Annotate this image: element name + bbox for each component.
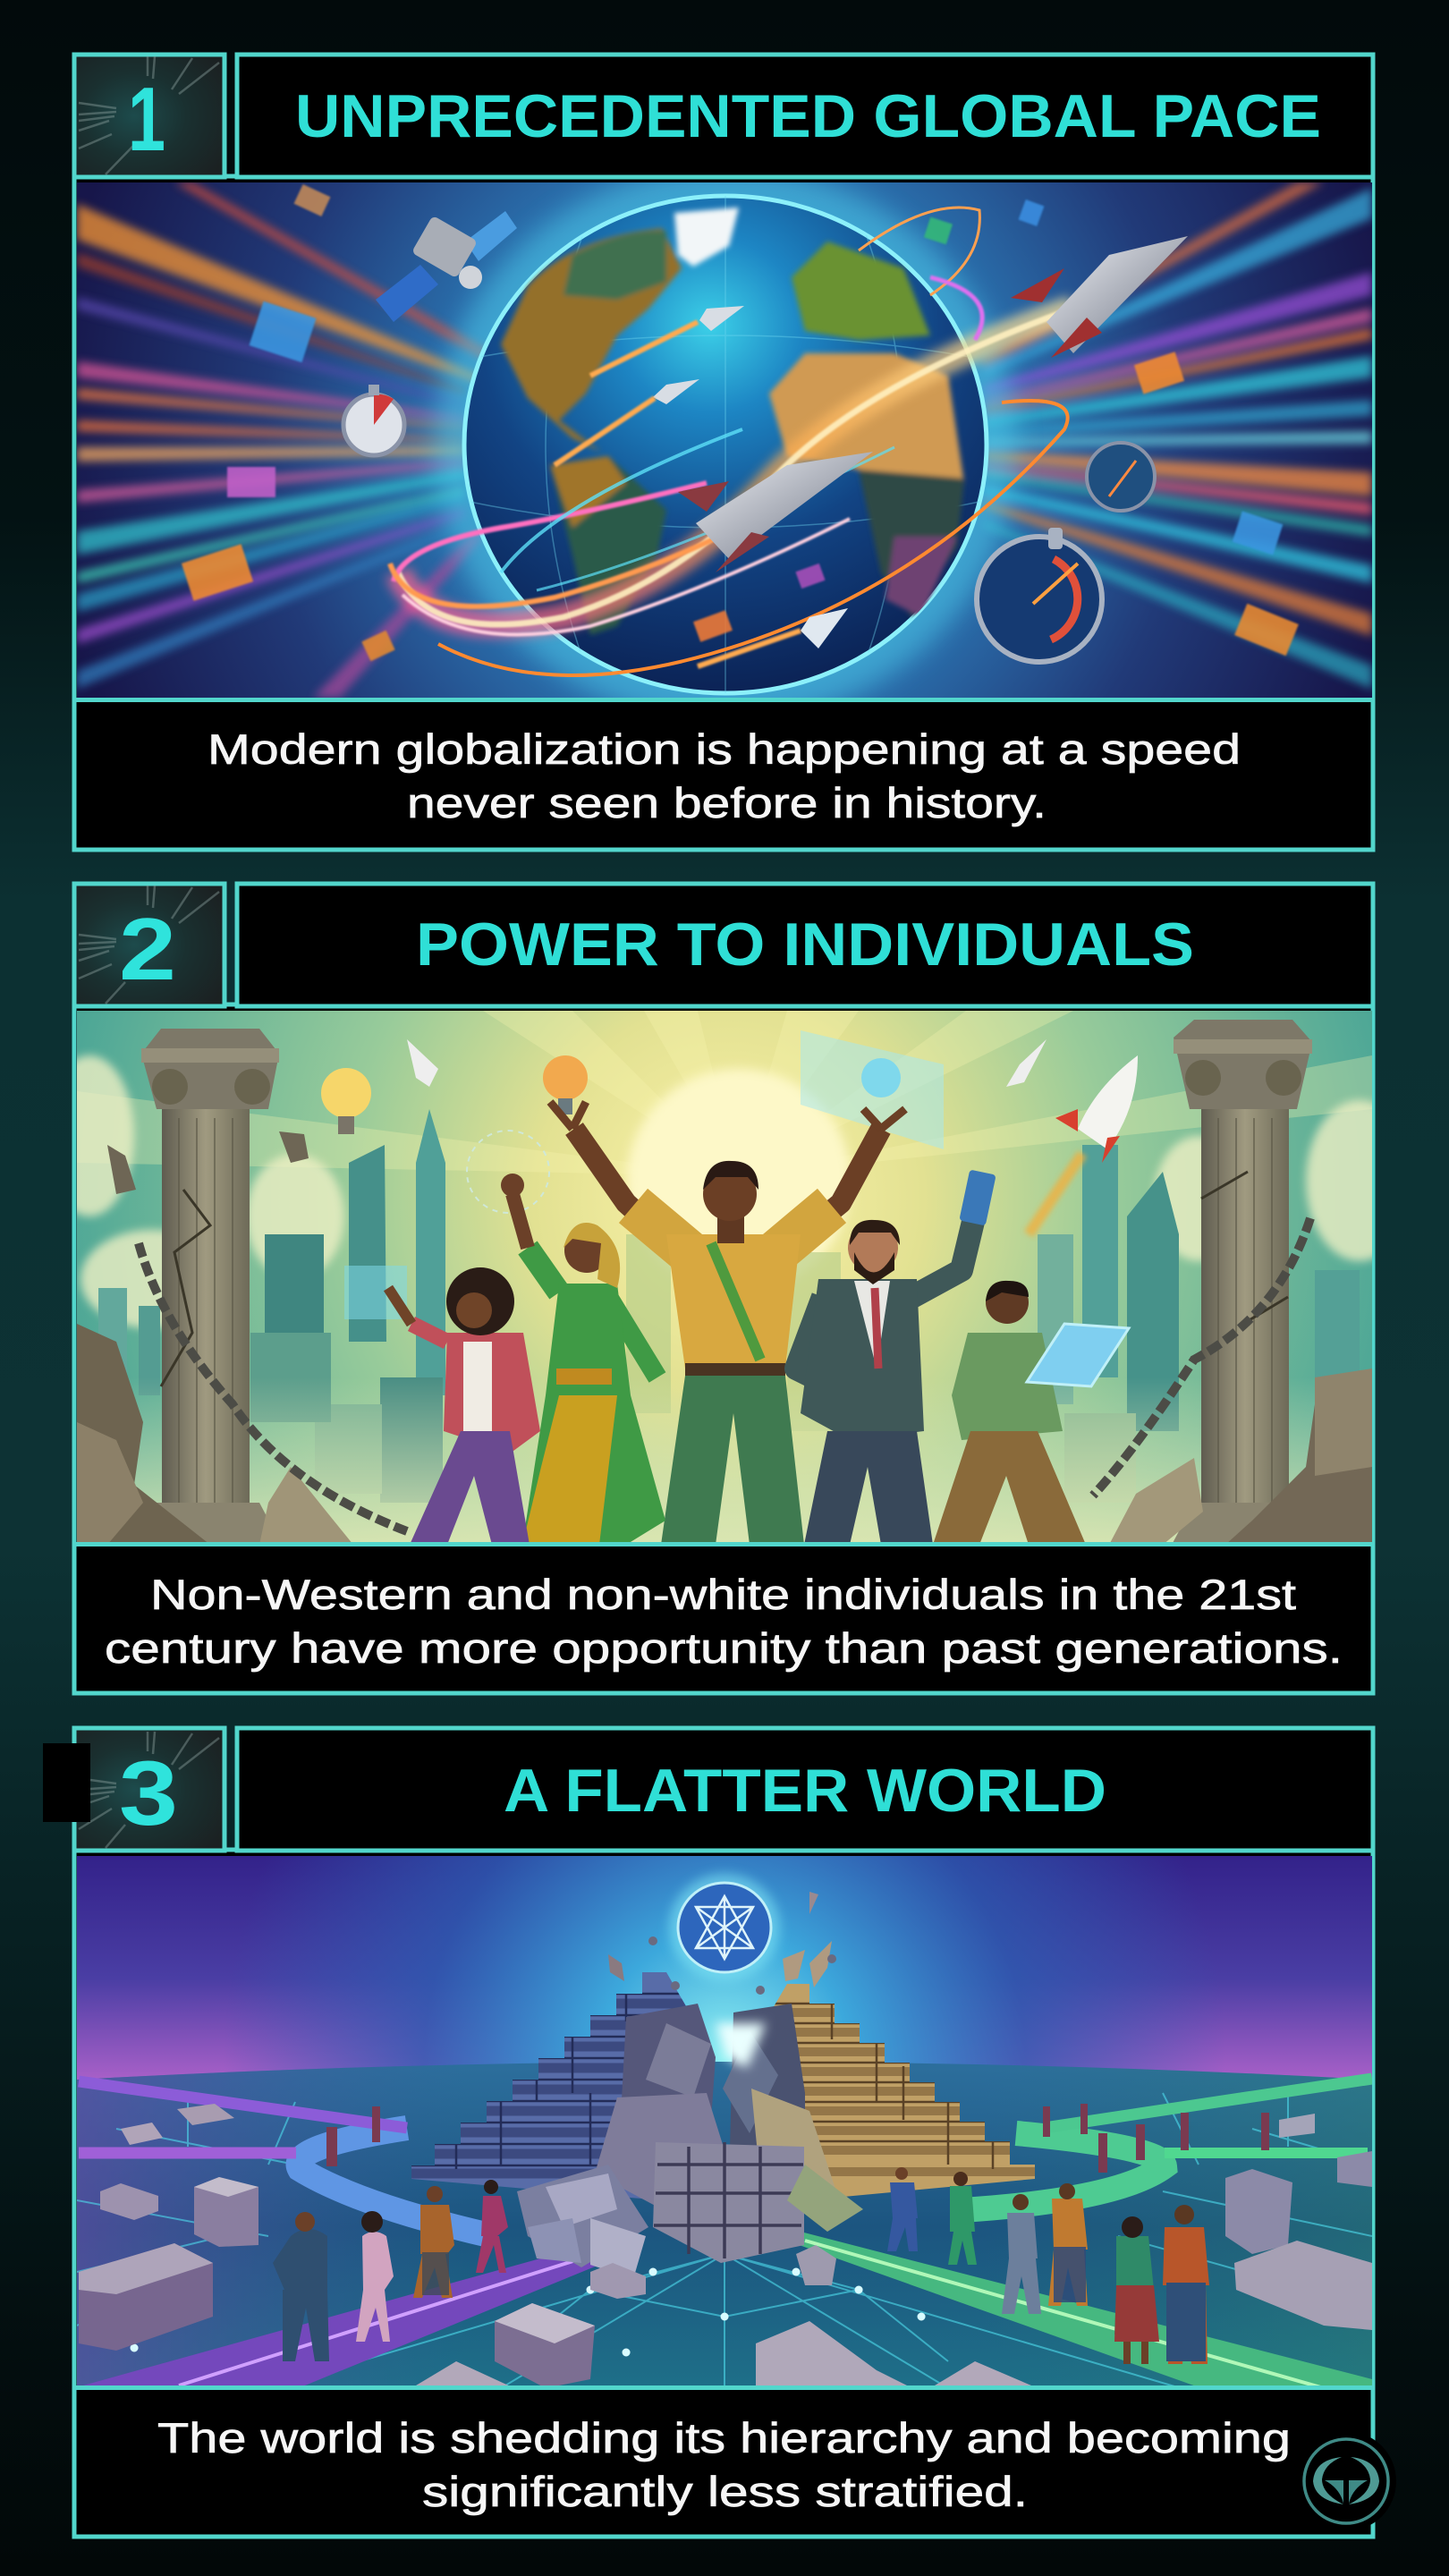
panel 3: a flatter world bbox=[74, 1728, 1373, 2537]
city skyline bbox=[98, 1109, 1360, 1503]
flying data cards bbox=[182, 184, 1299, 661]
panel frame 2 bbox=[74, 1004, 1373, 1693]
black redaction block bbox=[43, 1743, 90, 1822]
title bar 2 bbox=[237, 884, 1373, 1006]
number badge 1 bbox=[74, 55, 225, 177]
number badge 1: 1 bbox=[128, 70, 165, 170]
central raised-arms man bbox=[550, 1102, 905, 1545]
woman in green dress bbox=[501, 1174, 665, 1545]
network emblem with fragments bbox=[608, 1874, 836, 1995]
right broken pillar bbox=[1172, 1020, 1324, 1545]
man in suit with phone bbox=[796, 1170, 996, 1545]
rubble core bbox=[617, 2004, 716, 2182]
number badge 2 bbox=[74, 884, 225, 1006]
satellite bbox=[376, 211, 517, 322]
panel frame 3 bbox=[74, 1850, 1373, 2537]
orbit light trails bbox=[390, 208, 1073, 675]
divider line 3 bbox=[74, 2385, 1373, 2390]
title bar 3 bbox=[237, 1728, 1373, 1851]
title bar 1: UNPRECEDENTED GLOBAL PACE bbox=[295, 82, 1321, 150]
round logo badge bbox=[1296, 2431, 1396, 2531]
title bar 2: POWER TO INDIVIDUALS bbox=[416, 911, 1194, 979]
ground plane bbox=[77, 2062, 1372, 2388]
caption 1: never seen before in history. bbox=[407, 779, 1046, 826]
caption 1: Modern globalization is happening at a speed bbox=[208, 725, 1241, 773]
panel 2: power to individuals bbox=[45, 884, 1413, 1693]
walking people: left group bbox=[273, 2180, 508, 2361]
panel frame 1 bbox=[74, 176, 1373, 850]
caption 3: significantly less stratified. bbox=[422, 2468, 1028, 2515]
woman in pink jacket bbox=[388, 1267, 540, 1545]
broken chains bbox=[139, 1218, 1310, 1531]
number badge 3 bbox=[74, 1728, 225, 1851]
clouds bbox=[45, 1055, 1413, 1328]
rock piles bbox=[77, 1324, 1372, 1545]
illustration: people rising between broken pillars bbox=[45, 1011, 1413, 1545]
scattered stone blocks bbox=[79, 2104, 1372, 2388]
pyramid bbox=[358, 1968, 1055, 2279]
number badge 2: 2 bbox=[119, 900, 176, 998]
left broken pillar bbox=[134, 1029, 282, 1545]
speed streaks bbox=[77, 182, 1372, 698]
illustration: globe with rockets and speed lines bbox=[77, 167, 1372, 722]
divider line 2 bbox=[74, 1542, 1373, 1546]
caption 2: century have more opportunity than past generations. bbox=[105, 1624, 1343, 1672]
panel 1: unprecedented global pace bbox=[74, 55, 1373, 850]
man in green shirt with tablet bbox=[933, 1281, 1129, 1545]
number badge 3: 3 bbox=[119, 1742, 178, 1844]
title bar 1 bbox=[237, 55, 1373, 177]
caption 1 bbox=[208, 725, 1241, 826]
caption 3: The world is shedding its hierarchy and becoming bbox=[157, 2414, 1291, 2462]
rockets bbox=[555, 236, 1188, 666]
globe bbox=[435, 167, 1016, 722]
title bar 3: A FLATTER WORLD bbox=[504, 1757, 1106, 1825]
caption 2 bbox=[105, 1571, 1343, 1672]
stopwatches and gauges bbox=[343, 385, 1155, 662]
sun and rays bbox=[77, 1011, 1372, 1292]
walking people: right group bbox=[887, 2167, 1209, 2364]
caption 2: Non-Western and non-white individuals in the 21st bbox=[150, 1571, 1296, 1618]
green path bbox=[794, 2079, 1372, 2388]
divider line 1 bbox=[74, 698, 1373, 702]
caption 3 bbox=[157, 2414, 1291, 2515]
purple path bbox=[79, 2081, 604, 2385]
illustration: crumbling pyramid on networked plain bbox=[77, 1856, 1372, 2388]
floating bulbs, rockets, screens bbox=[107, 1030, 1138, 1319]
distant walkers bbox=[326, 2104, 1269, 2173]
